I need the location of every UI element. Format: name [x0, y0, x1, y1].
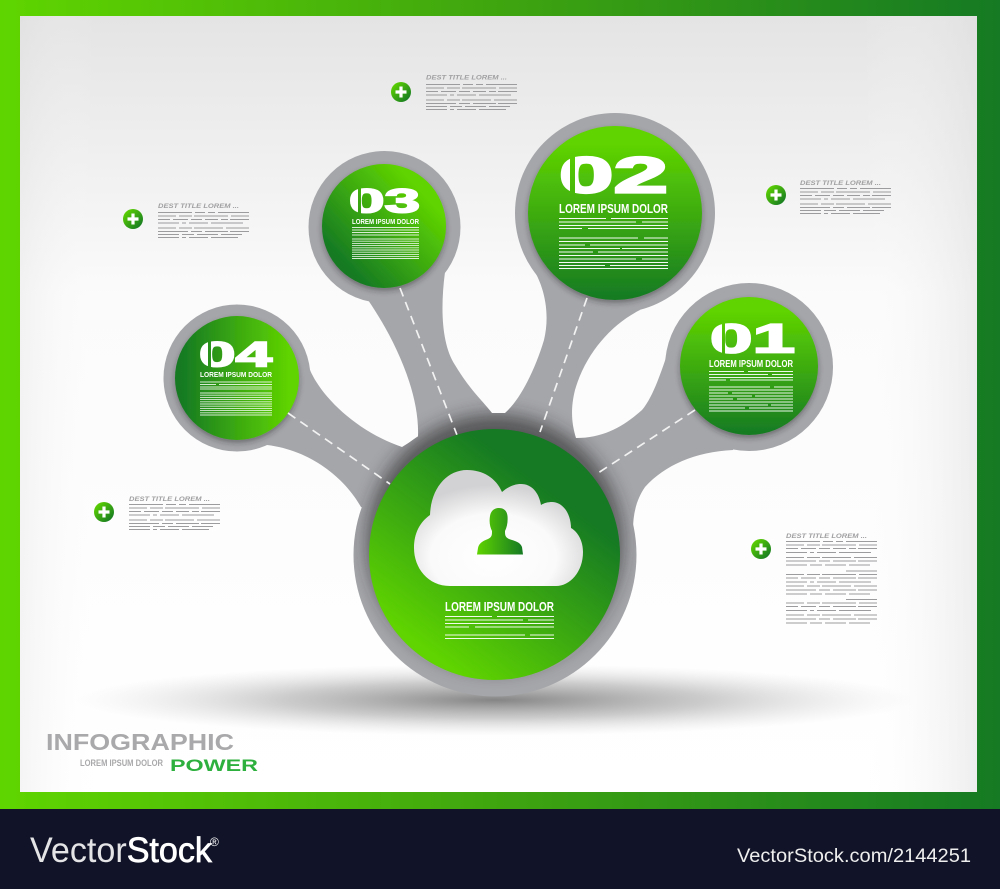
heading 03: LOREM IPSUM DOLOR — [352, 217, 419, 226]
plus icon — [391, 82, 411, 102]
node 04 — [164, 304, 310, 452]
disc 01 — [680, 297, 818, 435]
ring 01 — [665, 283, 833, 451]
icon: cloud — [414, 470, 583, 586]
image id: VectorStock.com/2144251 — [737, 845, 971, 867]
central hub — [369, 429, 620, 680]
hub heading: LOREM IPSUM DOLOR — [445, 600, 554, 614]
text lines 04 — [200, 382, 272, 415]
note: lower left — [94, 496, 220, 530]
node 01 — [665, 283, 833, 451]
number slit 02 — [570, 150, 575, 196]
node 02 — [515, 113, 715, 313]
number 03: 03 — [349, 182, 420, 220]
ring 03 — [308, 151, 460, 303]
node 03 — [308, 151, 460, 303]
note heading: DEST TITLE LOREM ... — [426, 74, 507, 82]
dashed road lines — [288, 288, 695, 484]
number slit 01 — [722, 320, 725, 356]
icon: person — [477, 508, 523, 554]
note text lines — [800, 188, 891, 214]
hub ring — [354, 414, 636, 696]
text lines 02 — [559, 218, 668, 268]
hub diagram — [164, 113, 833, 696]
VectorStock logo: VectorStock — [30, 831, 212, 870]
number 01: 01 — [710, 316, 795, 362]
plus icon — [751, 539, 771, 559]
note heading: DEST TITLE LOREM ... — [786, 533, 867, 540]
note heading: DEST TITLE LOREM ... — [800, 180, 881, 187]
hub shadow on roads — [367, 414, 623, 670]
hub text lines — [445, 616, 554, 638]
plus icon — [94, 502, 114, 522]
hub disc — [369, 429, 620, 680]
note heading: DEST TITLE LOREM ... — [158, 203, 239, 210]
heading 01: LOREM IPSUM DOLOR — [709, 359, 794, 370]
plus icon — [766, 185, 786, 205]
disc 03 — [322, 164, 446, 288]
subtitle placeholder: LOREM IPSUM DOLOR — [80, 758, 163, 769]
note: lower right — [751, 533, 877, 623]
number slit 03 — [358, 185, 361, 215]
disc 02 — [528, 126, 702, 300]
note: upper right — [766, 180, 891, 214]
number 02: 02 — [559, 146, 668, 204]
ring 04 — [164, 304, 310, 452]
note text lines — [426, 84, 517, 110]
text lines 01 — [709, 372, 793, 411]
title word: INFOGRAPHIC — [46, 729, 234, 755]
title: INFOGRAPHIC POWER — [46, 729, 258, 775]
text lines 03 — [352, 228, 419, 258]
number 04: 04 — [199, 336, 273, 374]
plus icon — [123, 209, 143, 229]
note: top — [391, 74, 517, 110]
heading 02: LOREM IPSUM DOLOR — [559, 202, 668, 216]
heading 04: LOREM IPSUM DOLOR — [200, 370, 273, 379]
connecting roads — [237, 213, 749, 555]
power word: POWER — [170, 756, 258, 775]
note heading: DEST TITLE LOREM ... — [129, 496, 210, 503]
ring 02 — [515, 113, 715, 313]
ground shadow — [75, 664, 915, 736]
disc 04 — [175, 316, 299, 440]
note: upper left — [123, 203, 249, 238]
number slit 04 — [208, 338, 211, 369]
note text lines — [786, 542, 877, 623]
note text lines — [158, 212, 249, 238]
watermark bar — [0, 809, 1000, 889]
note text lines — [129, 504, 220, 530]
registered mark: ® — [210, 835, 219, 849]
